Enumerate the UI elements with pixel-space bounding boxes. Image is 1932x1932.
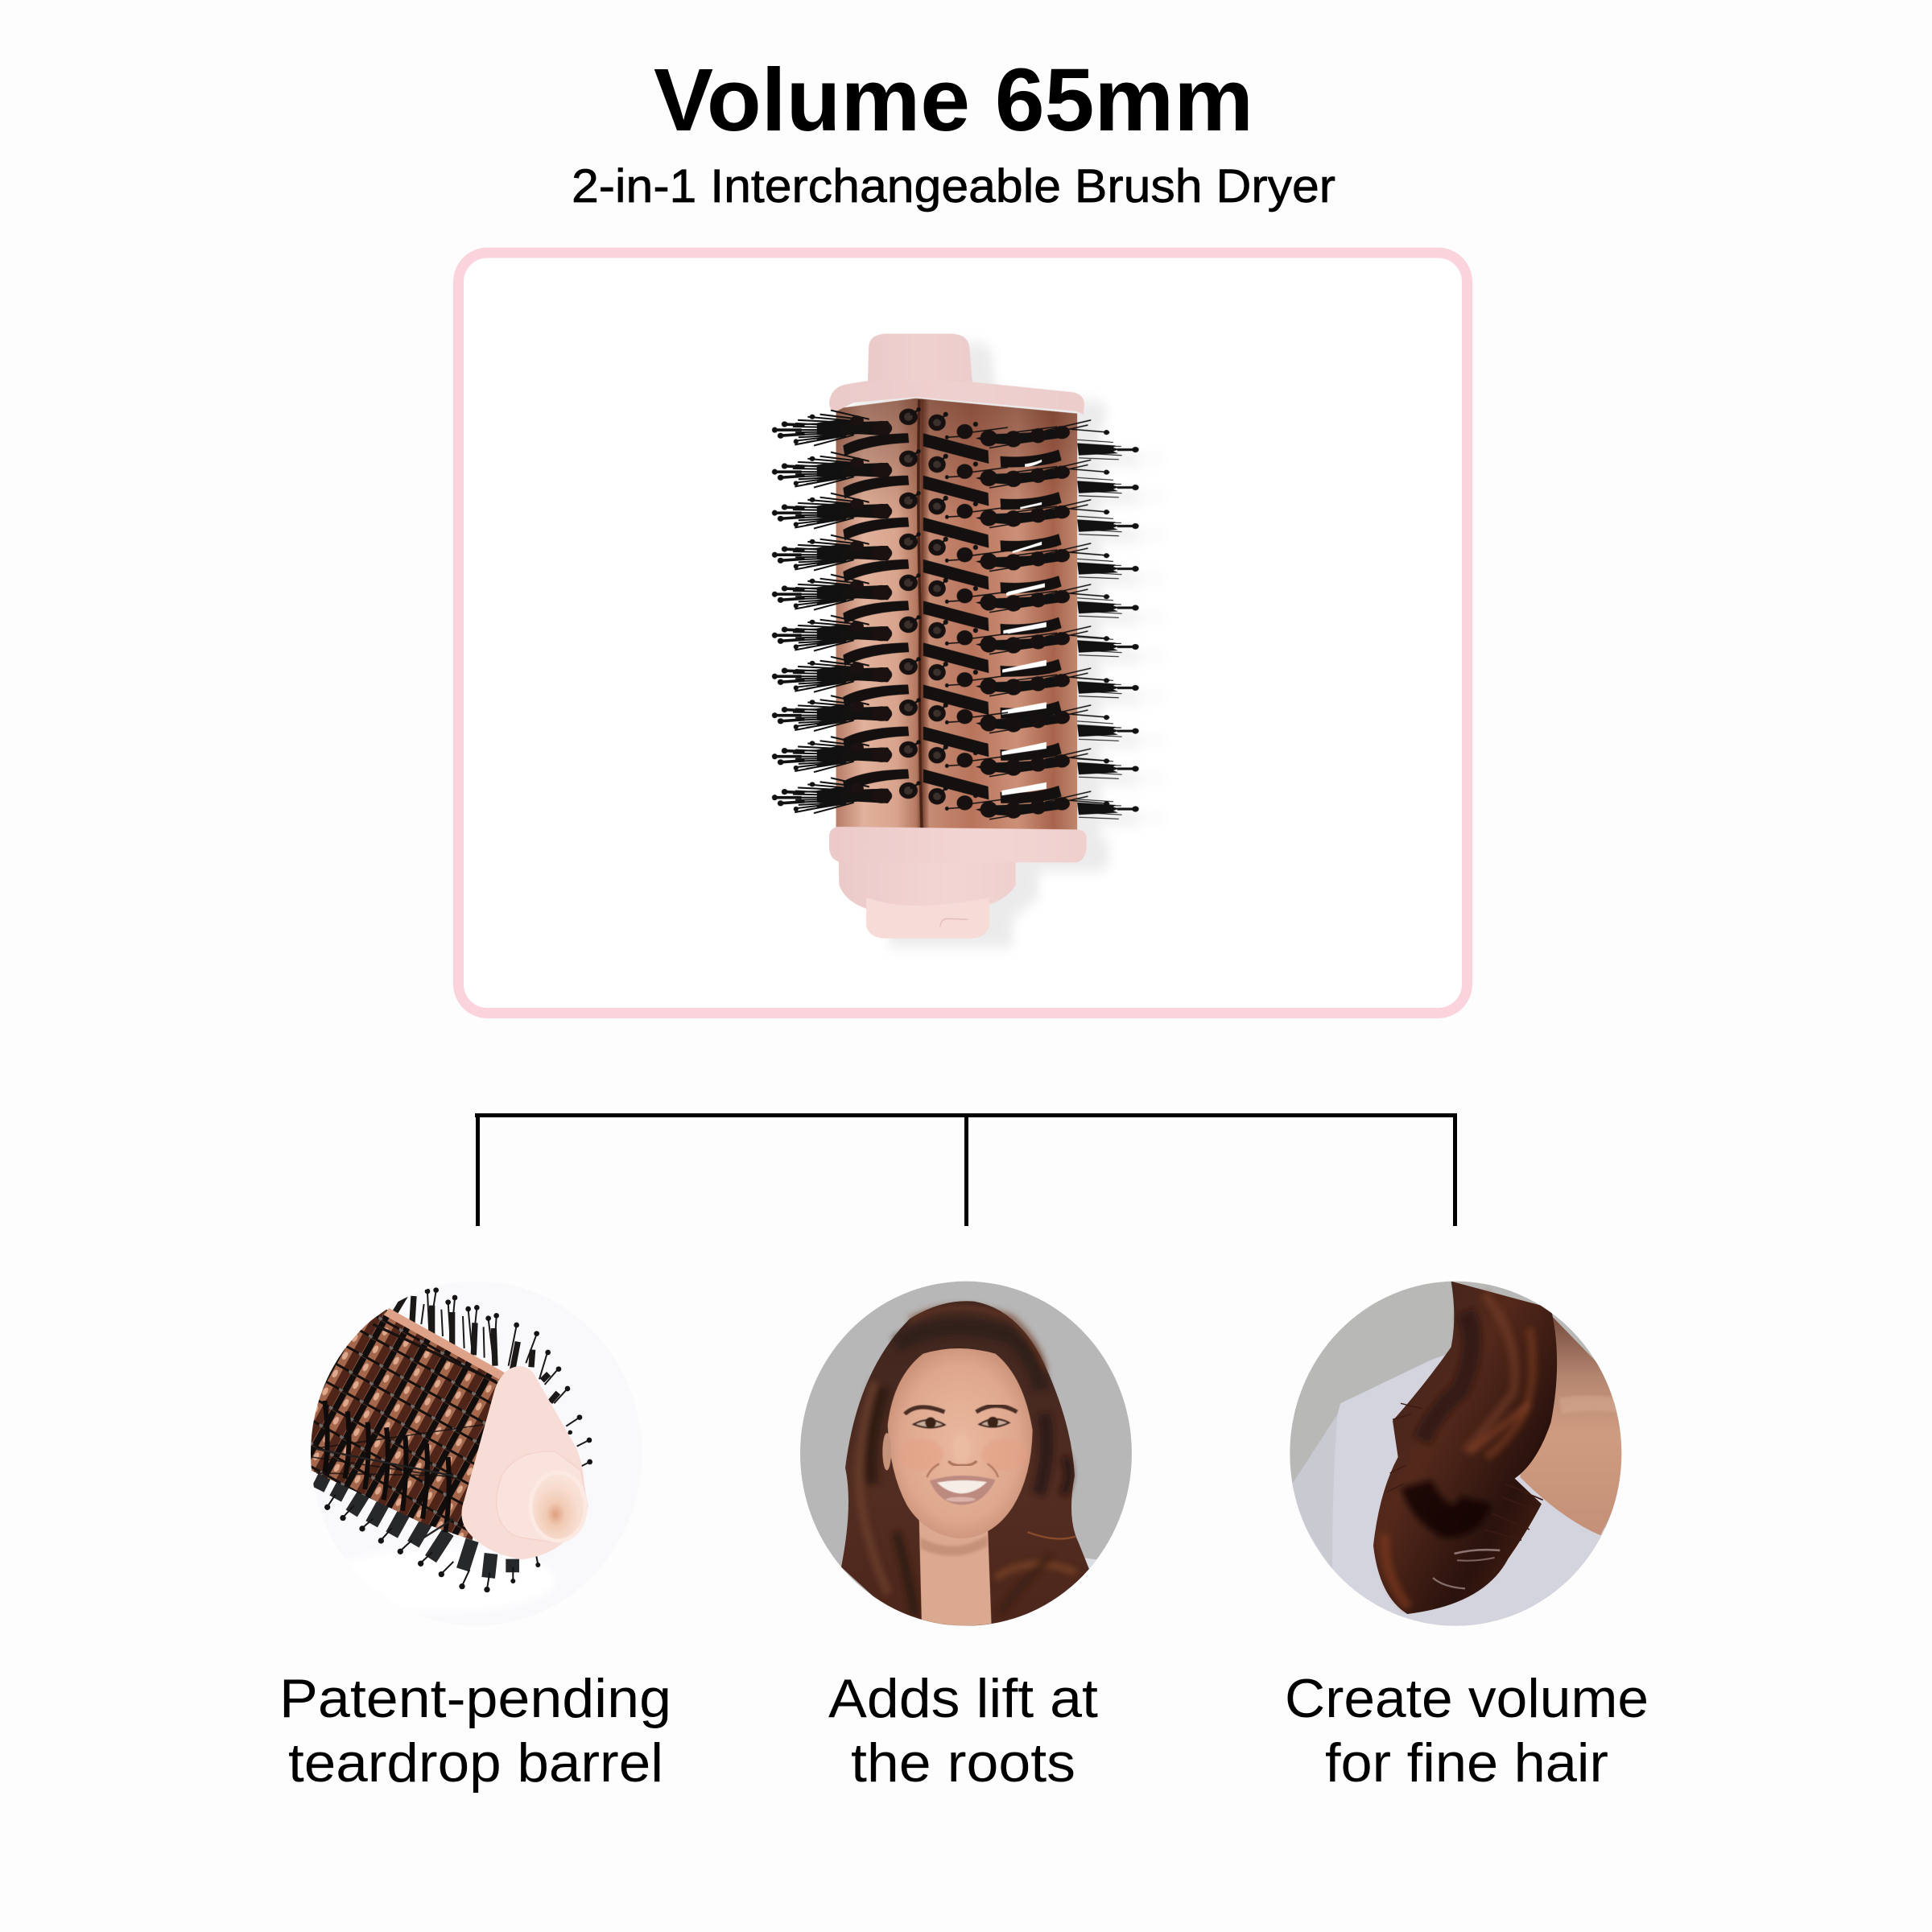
mouth [930, 1476, 996, 1505]
brush drop shadow [852, 343, 1162, 947]
center pins [899, 407, 948, 804]
product image: volume brush attachment [772, 334, 1162, 947]
caption: adds lift at the roots: the roots [851, 1732, 1075, 1794]
subtitle: 2-in-1 Interchangeable Brush Dryer [572, 160, 1335, 213]
barrel slots [843, 433, 1062, 803]
neck skin [1520, 1304, 1626, 1535]
caption: create volume for fine hair: Create volume [1285, 1668, 1649, 1729]
right bristles [1077, 440, 1139, 819]
caption: patent-pending teardrop barrel: teardrop barrel [288, 1732, 663, 1794]
hair [841, 1301, 1089, 1627]
photo: teardrop barrel [311, 1287, 592, 1592]
caption: adds lift at the roots: Adds lift at [828, 1668, 1098, 1729]
teardrop end cap [461, 1366, 584, 1559]
nose [948, 1461, 976, 1465]
copper barrel with slots [308, 1308, 505, 1540]
upper neck [868, 334, 972, 384]
neck [919, 1519, 992, 1626]
lower bristles [318, 1476, 538, 1589]
photo: smiling woman [797, 1278, 1135, 1629]
top bristles [394, 1290, 590, 1467]
caption: patent-pending teardrop barrel: Patent-pending [279, 1668, 671, 1729]
bottom cap [829, 827, 1087, 862]
nozzle collar [497, 1451, 588, 1543]
smile lines [927, 1463, 998, 1477]
face [888, 1348, 1033, 1538]
panel: product frame [459, 253, 1467, 1013]
caption: patent-pending teardrop barrel [279, 1668, 671, 1794]
eyebrows [905, 1406, 1017, 1414]
title: Volume 65mm [654, 51, 1253, 150]
copper barrel [836, 398, 1077, 832]
photo: voluminous hair over shoulder [1288, 1278, 1626, 1629]
nozzle opening [549, 1489, 588, 1542]
shirt [1290, 1344, 1626, 1629]
left bristles [772, 411, 892, 813]
eyes [914, 1417, 1009, 1428]
hair [1373, 1282, 1557, 1614]
hair highlights and flyaways [1387, 1403, 1543, 1588]
caption: create volume for fine hair: for fine hair [1325, 1732, 1608, 1794]
caption: adds lift at the roots [828, 1668, 1098, 1794]
front bristle rows [945, 420, 1109, 819]
connector: tree lines [475, 1113, 1457, 1226]
caption: create volume for fine hair [1285, 1668, 1649, 1794]
bottom collar [866, 898, 989, 939]
shirt [1085, 1558, 1096, 1569]
lower neck [839, 857, 1016, 913]
top cap [829, 381, 1084, 415]
